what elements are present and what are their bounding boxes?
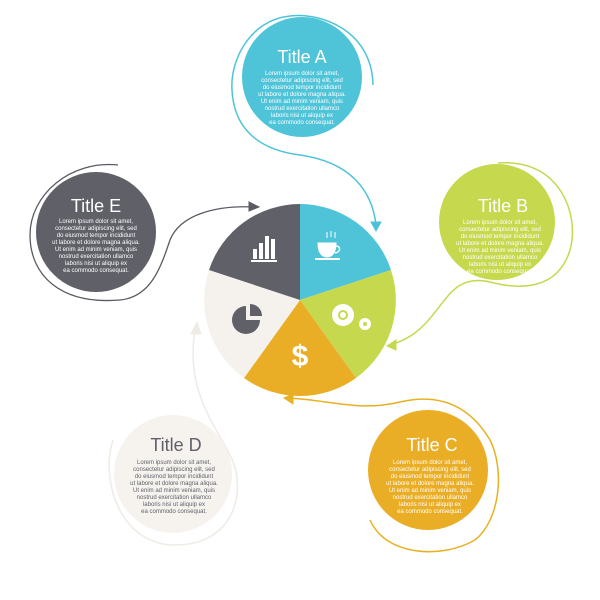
circle A: do eiusmod tempor incididunt <box>263 85 342 91</box>
circle A: Lorem ipsum dolor sit amet, <box>265 71 339 77</box>
circle C: Lorem ipsum dolor sit amet, <box>393 460 467 466</box>
circle D: do eiusmod tempor incididunt <box>135 474 214 480</box>
circle B: do eiusmod tempor incididunt <box>461 234 540 240</box>
circle D: ea commodo consequat. <box>141 509 207 515</box>
connector arrow D <box>109 322 237 545</box>
circle B: Ut enim ad minim veniam, quis <box>459 248 541 254</box>
circle B: laboris nisi ut aliquip ex <box>469 262 531 268</box>
circle D: Lorem ipsum dolor sit amet, <box>137 460 211 466</box>
circle A: Ut enim ad minim veniam, quis <box>261 99 343 105</box>
circle D: laboris nisi ut aliquip ex <box>143 502 205 508</box>
circle E: do eiusmod tempor incididunt <box>57 233 136 239</box>
circle C: Title C <box>406 435 458 455</box>
circle D <box>114 415 232 533</box>
circle B: nostrud exercitation ullamco <box>463 255 538 261</box>
circle A: laboris nisi ut aliquip ex <box>271 113 333 119</box>
circle B: ea commodo consequat. <box>467 269 533 275</box>
circle E: consectetur adipiscing elit, sed <box>55 226 137 232</box>
circle C: do eiusmod tempor incididunt <box>391 474 470 480</box>
circle B: consectetur adipiscing elit, sed <box>459 227 541 233</box>
circle C: Ut enim ad minim veniam, quis <box>389 488 471 494</box>
circle E: Ut enim ad minim veniam, quis <box>55 247 137 253</box>
circle E: Title E <box>71 196 121 216</box>
circle B: Title B <box>478 196 528 216</box>
icon: pie <box>232 304 262 334</box>
circle C: consectetur adipiscing elit, sed <box>389 467 471 473</box>
circle C: ut labore et dolore magna aliqua. <box>386 481 474 487</box>
connector arrow B <box>387 163 572 350</box>
circle E: ea commodo consequat. <box>63 268 129 274</box>
connector arrow E <box>30 165 259 301</box>
circle C: ea commodo consequat. <box>397 509 463 515</box>
connector arrow C <box>284 394 498 552</box>
circle A: consectetur adipiscing elit, sed <box>261 78 343 84</box>
icon: gears <box>332 304 371 330</box>
pie chart <box>204 204 396 396</box>
circle B <box>439 164 555 280</box>
circle A: Title A <box>277 47 327 67</box>
circle D: nostrud exercitation ullamco <box>137 495 212 501</box>
connector arrow A <box>232 15 381 231</box>
circle A: ea commodo consequat. <box>269 120 335 126</box>
icon: coffee cup <box>315 231 340 260</box>
circle E: nostrud exercitation ullamco <box>59 254 134 260</box>
circle C: laboris nisi ut aliquip ex <box>399 502 461 508</box>
circle C: nostrud exercitation ullamco <box>393 495 468 501</box>
circle B: ut labore et dolore magna aliqua. <box>456 241 544 247</box>
circle E: laboris nisi ut aliquip ex <box>65 261 127 267</box>
circle E <box>36 172 156 292</box>
icon: bar chart <box>251 236 277 262</box>
icon: dollar: $ <box>292 340 309 373</box>
circle E: Lorem ipsum dolor sit amet, <box>59 219 133 225</box>
circle B: Lorem ipsum dolor sit amet, <box>463 220 537 226</box>
circle C <box>368 410 488 530</box>
circle A <box>242 17 362 137</box>
circle D: Ut enim ad minim veniam, quis <box>133 488 215 494</box>
circle E: ut labore et dolore magna aliqua. <box>52 240 140 246</box>
circle D: ut labore et dolore magna aliqua. <box>130 481 218 487</box>
circle D: consectetur adipiscing elit, sed <box>133 467 215 473</box>
circle D: Title D <box>150 435 202 455</box>
circle A: nostrud exercitation ullamco <box>265 106 340 112</box>
circle A: ut labore et dolore magna aliqua. <box>258 92 346 98</box>
